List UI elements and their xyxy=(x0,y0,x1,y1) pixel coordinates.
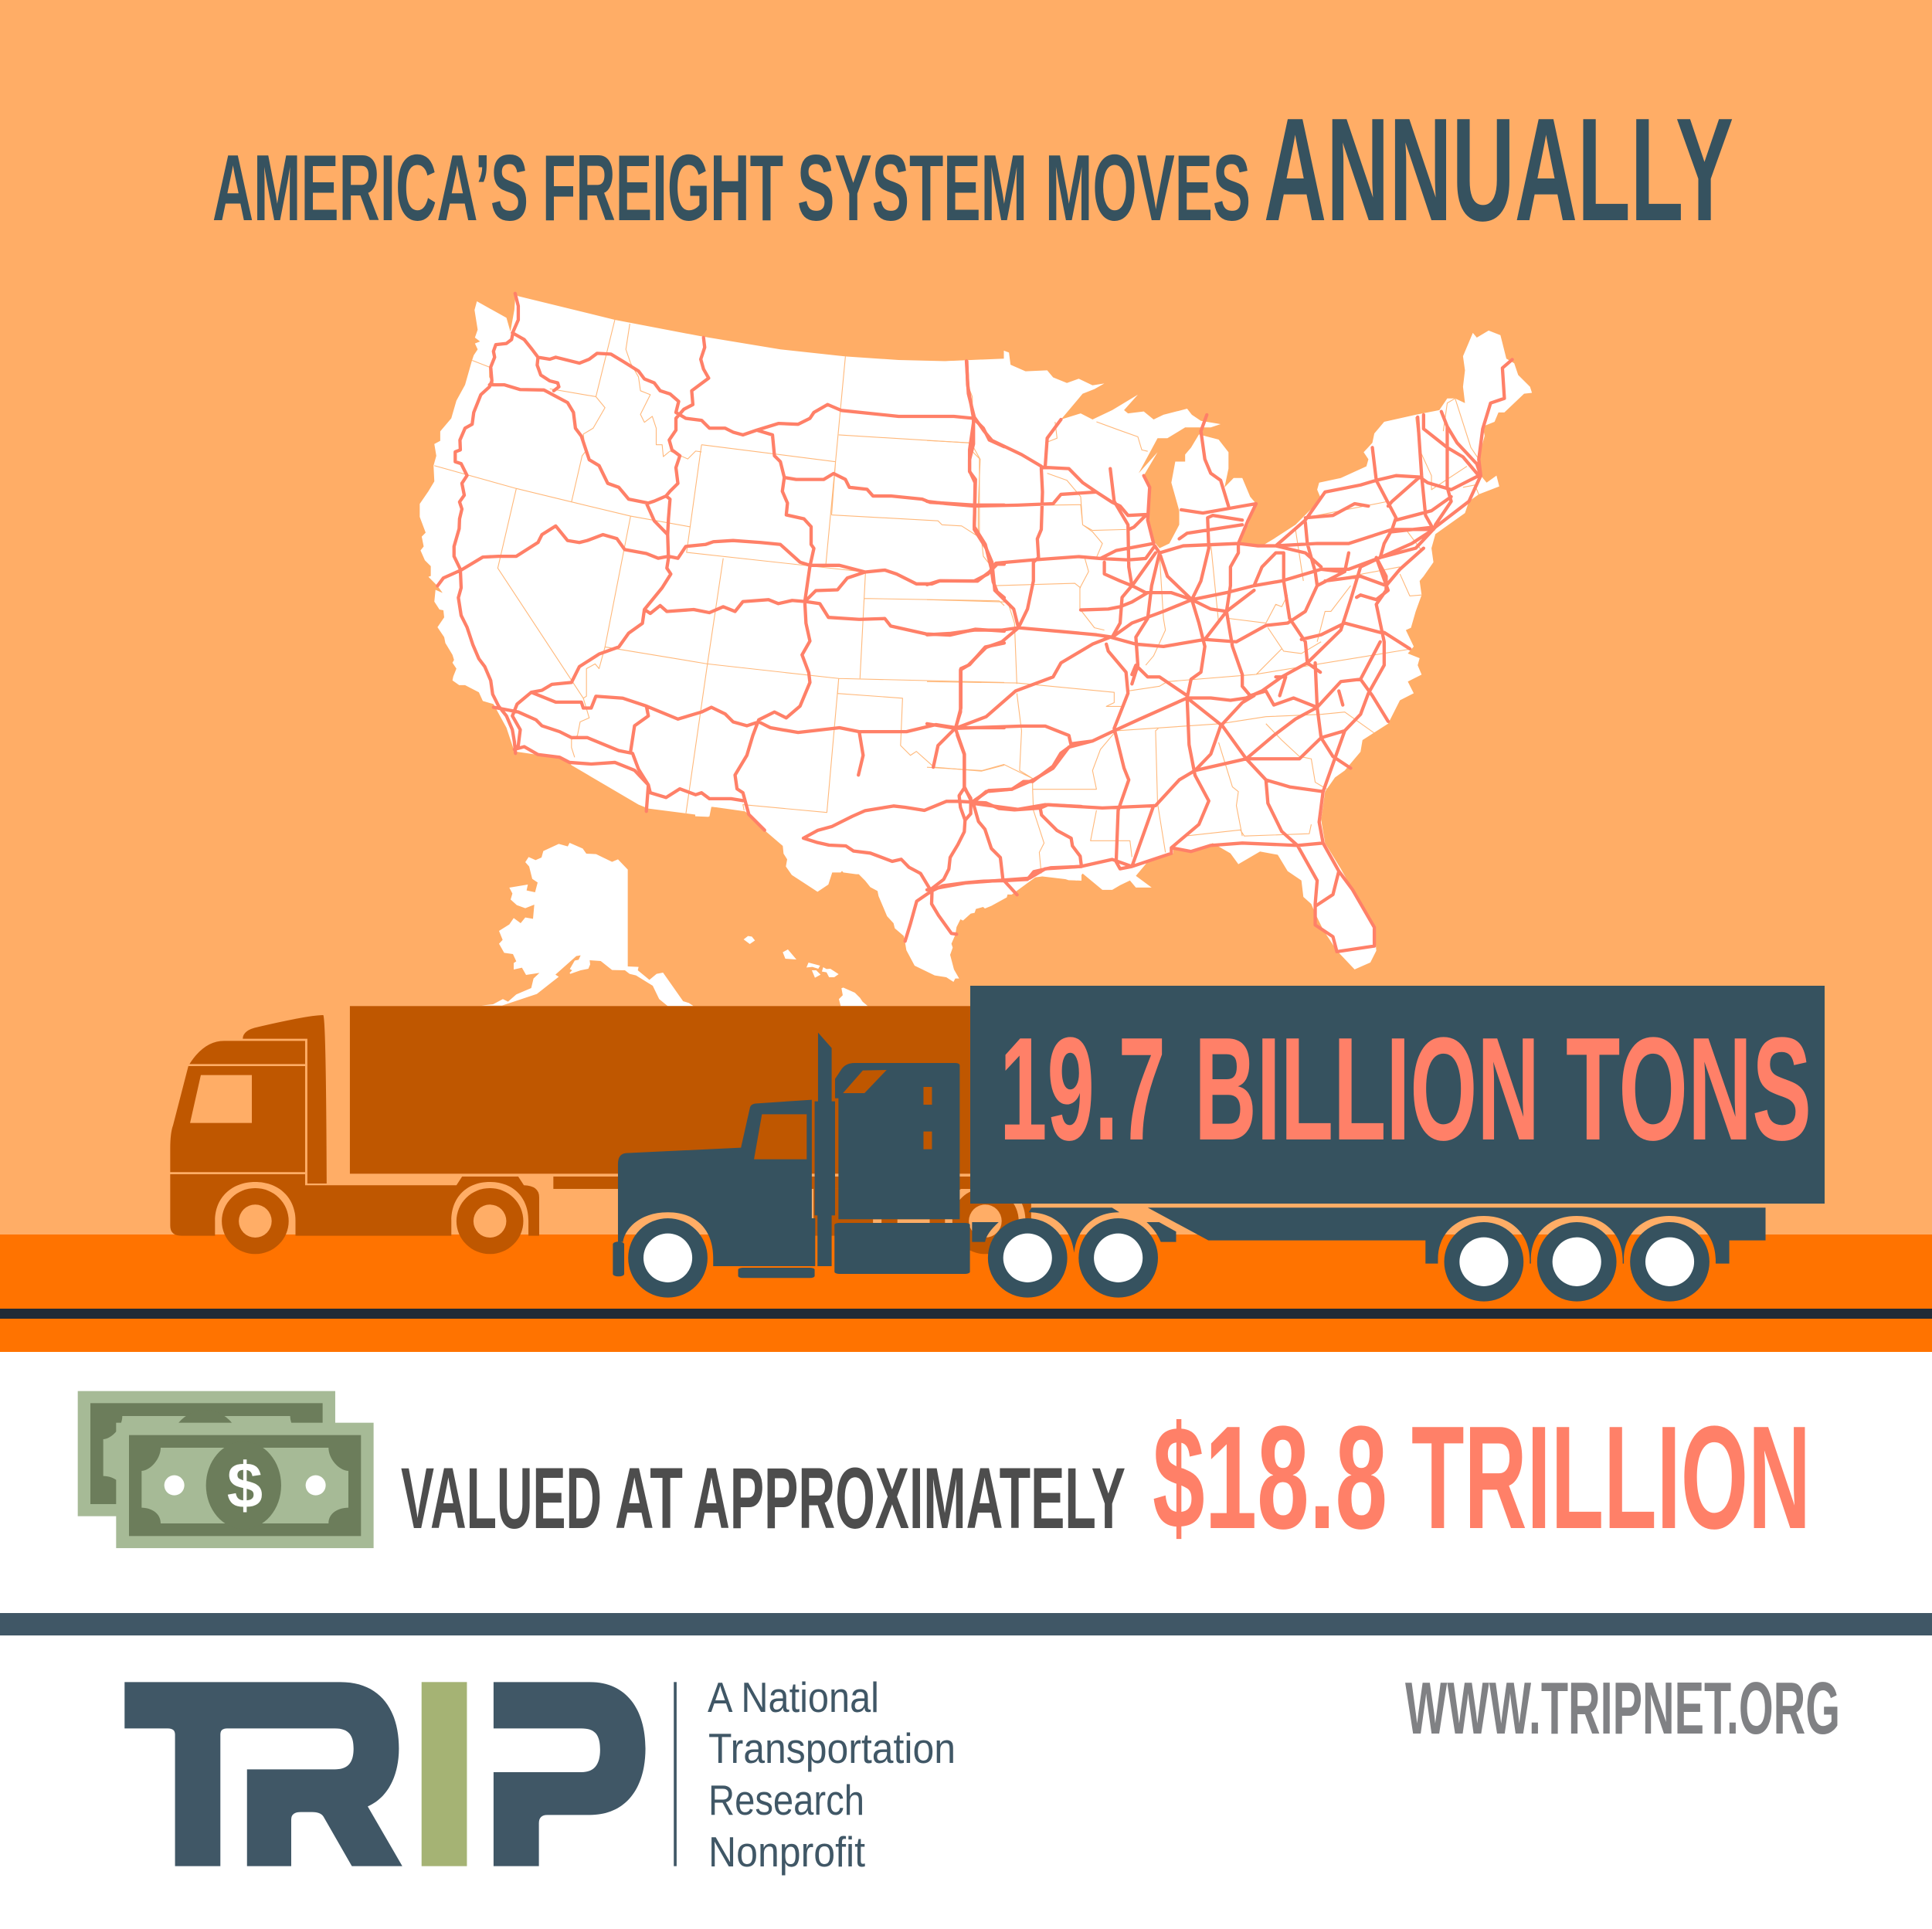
value text: AT xyxy=(615,1450,683,1547)
road band xyxy=(0,1234,1932,1352)
background panel xyxy=(0,0,1932,1234)
state borders xyxy=(434,320,1479,874)
title: MOVES xyxy=(1045,135,1251,240)
tagline: A National xyxy=(708,1673,879,1721)
icon: brown box truck xyxy=(170,1006,1031,1254)
value text: VALUED xyxy=(401,1450,602,1547)
icon: navy semi truck tractor xyxy=(613,1033,970,1298)
map: contiguous United States xyxy=(419,294,1532,982)
title: SYSTEM xyxy=(797,135,1027,240)
callout: 19.7 billion tons on trailer: BILLION xyxy=(1194,1007,1540,1171)
icon: dollar bills: $ xyxy=(227,1450,263,1522)
tagline: Transportation xyxy=(708,1724,956,1772)
divider bar xyxy=(0,1613,1932,1635)
logo: TRIP xyxy=(124,1682,677,1866)
icon: navy semi trailer undercarriage and wheels xyxy=(972,1207,1766,1302)
tagline xyxy=(708,1673,956,1876)
tagline: Research xyxy=(708,1776,864,1824)
title xyxy=(212,88,1733,252)
callout: 19.7 billion tons on trailer xyxy=(970,986,1825,1204)
value text: APPROXIMATELY xyxy=(693,1450,1126,1547)
title: FREIGHT xyxy=(542,135,783,240)
tagline: Nonprofit xyxy=(708,1828,865,1876)
value text: $18.8 xyxy=(1153,1396,1387,1560)
map: Alaska and Hawaii xyxy=(481,843,868,1006)
title: AMERICA’S xyxy=(212,135,528,240)
callout: 19.7 billion tons on trailer: 19.7 xyxy=(1000,1007,1166,1171)
value text xyxy=(401,1396,1811,1560)
icon: dollar bills xyxy=(78,1391,374,1548)
interstate highways xyxy=(437,294,1513,952)
